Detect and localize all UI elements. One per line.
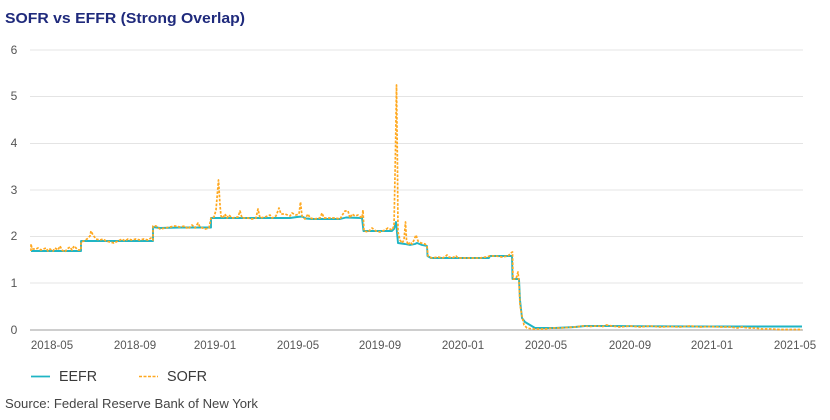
y axis labels: 3	[11, 183, 18, 197]
x axis labels: 2020-09	[609, 340, 651, 352]
x axis labels: 2020-05	[525, 340, 567, 352]
legend: EEFR: EEFR	[59, 369, 97, 385]
source note: Source: Federal Reserve Bank of New York	[5, 396, 258, 411]
x axis labels: 2020-01	[442, 340, 484, 352]
x axis labels: 2019-01	[194, 340, 236, 352]
y axis labels: 5	[11, 89, 18, 103]
line: SOFR	[31, 85, 802, 330]
legend: SOFR: SOFR	[167, 369, 207, 385]
y axis labels: 6	[11, 43, 18, 57]
x axis labels	[31, 340, 816, 352]
x axis labels: 2018-09	[114, 340, 156, 352]
line: EFFR	[31, 216, 802, 328]
legend	[31, 369, 207, 385]
x axis labels: 2018-05	[31, 340, 73, 352]
y axis labels: 4	[11, 136, 18, 150]
legend: EEFR	[31, 369, 97, 385]
y axis labels	[11, 43, 18, 337]
x axis labels: 2021-05	[774, 340, 816, 352]
x axis labels: 2021-01	[691, 340, 733, 352]
x axis labels: 2019-05	[277, 340, 319, 352]
legend: SOFR	[139, 369, 207, 385]
x axis labels: 2019-09	[359, 340, 401, 352]
y axis labels: 0	[11, 323, 18, 337]
title: SOFR vs EFFR (Strong Overlap)	[5, 10, 245, 27]
y axis labels: 2	[11, 229, 18, 243]
y axis labels: 1	[11, 276, 18, 290]
